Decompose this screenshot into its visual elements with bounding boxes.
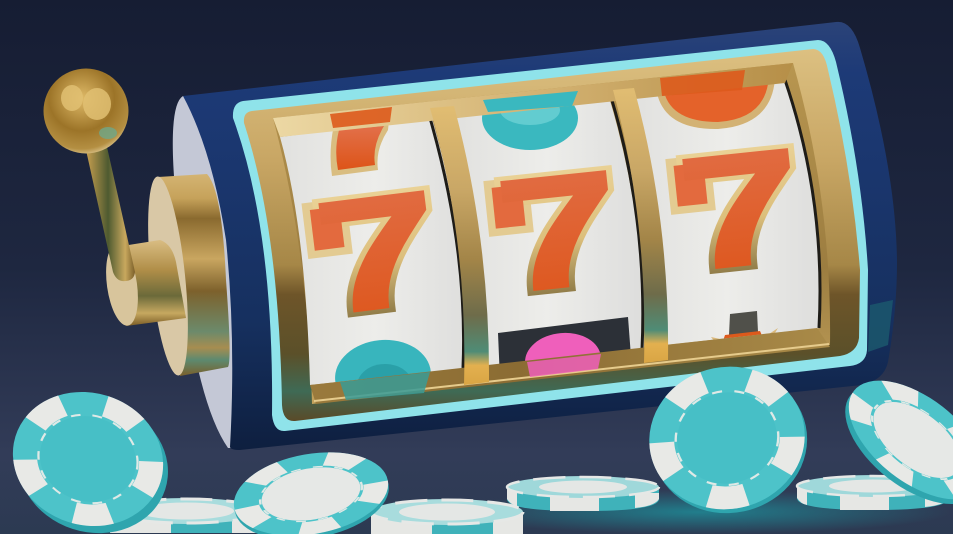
- tilted chip far right: [824, 358, 953, 527]
- teal reflection in top rim: [483, 91, 578, 112]
- seven 3: 7: [672, 115, 810, 303]
- neon cyan outline: [233, 40, 868, 431]
- flat chip left: [110, 498, 262, 533]
- reel 2: [457, 102, 644, 365]
- flat chip lower centre: [371, 499, 523, 534]
- lever hub disc: [141, 174, 230, 377]
- orange reflection in top rim: [330, 70, 745, 128]
- floor reflection: [450, 490, 950, 534]
- flat chip right: [797, 475, 949, 510]
- reel divider 1: [430, 106, 489, 385]
- reel edge shadows: [430, 80, 820, 368]
- seven 3: 7: [672, 115, 810, 303]
- lever rod: [86, 147, 135, 281]
- tilted chip lower middle: [227, 441, 395, 534]
- teal symbol: [335, 340, 431, 382]
- lever ball: [44, 68, 128, 154]
- seven 1: 7: [308, 157, 448, 347]
- flat chip centre: [507, 476, 659, 511]
- teal top symbol: [482, 106, 578, 150]
- teal and pink rim reflections: [340, 372, 430, 400]
- orange half symbol: [658, 84, 774, 129]
- slot machine: [44, 22, 897, 450]
- rim highlight line: [314, 344, 829, 401]
- pink symbol: [525, 332, 600, 361]
- seven 2: 7: [490, 137, 628, 325]
- window recess wall: [273, 63, 830, 404]
- navy front bezel: [183, 22, 897, 450]
- seven 1: 7: [308, 157, 448, 347]
- tilted chip right: [619, 336, 835, 534]
- seven 2: 7: [490, 137, 628, 325]
- lever barrel: [101, 240, 186, 328]
- top symbol fragment: [330, 126, 388, 176]
- gold frame: [244, 49, 860, 421]
- reel divider 2: [613, 88, 668, 363]
- window bottom rim: [310, 328, 830, 404]
- window top rim: [273, 63, 793, 137]
- reel 1: [280, 120, 462, 385]
- dark bottom fragment: [711, 311, 778, 340]
- machine cabinet side: [173, 96, 245, 448]
- reel 3: [636, 83, 820, 344]
- dark bottom symbol: [498, 317, 630, 364]
- teal reflection on bezel: [868, 300, 893, 352]
- tilted chip far left: [0, 350, 205, 534]
